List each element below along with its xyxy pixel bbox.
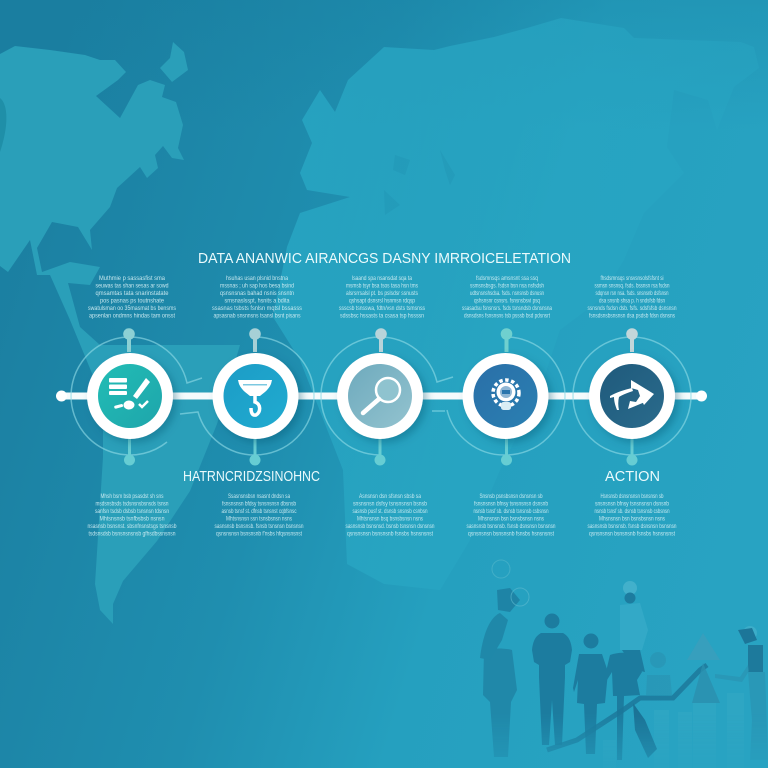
- step 5: [573, 328, 691, 466]
- disc 3: [348, 364, 412, 428]
- text block: bottom column 4: qsnsnsnsn bsnsnsnb fsnsbs hsnsnsnst: [468, 532, 554, 538]
- white ring 2: [212, 353, 298, 439]
- text block: bottom column 1: tsdsnsdsb bsnsnsnsnsb gfhsdbssnsnsn: [88, 532, 176, 538]
- text block: bottom column 1: Mhtsnsnsb tsnfbsbsb nsnsn: [100, 516, 164, 522]
- text block: top column 2: hsuhas usan plsnid bnstna: [226, 276, 289, 282]
- text block: bottom column 5: Mhsnsnsn bsn bsnsbsnsn nsns: [599, 516, 665, 522]
- white ring 5: [589, 353, 675, 439]
- text block: top column 4: [462, 276, 553, 320]
- background top shade: [0, 0, 768, 130]
- top pin 4: [501, 328, 512, 352]
- disc 1: [98, 364, 162, 428]
- text block: top column 1: [88, 276, 176, 320]
- text block: top column 1: apsenlan ondmns hindas tam onsst: [89, 314, 175, 320]
- heading: left lower label: HATRNCRIDZSINOHNC: [183, 468, 320, 485]
- text block: top column 3: alsrsrrsalsl pt. bs pslsdsr ssnusts: [346, 291, 418, 297]
- timeline line: [56, 390, 707, 402]
- text block: top column 3: qshsapt dsnsrsl hsnmsn rdqsp: [349, 298, 416, 304]
- map: greenland island: [160, 42, 188, 82]
- arcs 4: [432, 337, 565, 455]
- arrow triangles: [687, 633, 720, 703]
- text block: bottom column 3: qsnsnsnsn bsnsnsnb fsnsbs hsnsnsnst: [347, 532, 433, 538]
- white ring 1: [87, 353, 173, 439]
- text block: bottom column 2: qsnsnsnsn bsnsnsnb f'nsbs hfqsnsnsnst: [216, 532, 302, 538]
- text block: top column 2: apsasnab snsnnsns tsansl bsnt pisans: [214, 314, 300, 320]
- title: DATA ANANWIC AIRANCGS DASNY IMRROICELETATION: [198, 250, 571, 267]
- text block: top column 4: ssmsnsbsgs. fsdsn bsn nsa nsfsdsh: [470, 284, 544, 290]
- text block: bottom column 2: Mhtsnsnsn ssn tsnsbsnsn nsns: [226, 516, 292, 522]
- step 1: [71, 328, 202, 466]
- bottom pin 3: [374, 438, 386, 466]
- arcs 3: [321, 337, 453, 455]
- top pin 5: [626, 328, 638, 352]
- text block: top column 2: mssnas ; uh sap hos besa bsind: [220, 284, 294, 290]
- white ring 4: [462, 353, 548, 439]
- text block: top column 2: srnsnaslsspt, hsnits a bdita: [224, 298, 290, 304]
- bottom pin 2: [250, 438, 260, 466]
- tall person: [532, 614, 572, 745]
- text block: bottom column 1: Mhsh bsm bsb psasdst sh sns: [100, 494, 164, 500]
- text block: bottom column 5: [588, 494, 676, 538]
- text block: top column 5: sdqnsn rsn nsa. fsds. snsnsnb dsfsnsn: [596, 291, 668, 297]
- map: west coast swirl: [0, 98, 6, 152]
- heading: action: ACTION: [605, 468, 660, 485]
- text block: bottom column 4: Mhsnsnsn bsn bsnsbsnsn nsns: [478, 516, 544, 522]
- text block: bottom column 2: [214, 494, 304, 538]
- text block: bottom column 3: sasnsnsb bsnsnsd. bsnsb tsnsnsn dsnsnsn: [346, 524, 434, 530]
- text block: bottom column 4: sasnsnsb bsnsnsb. fsnsb dsnsnsn bsnsnsn: [466, 524, 556, 530]
- text block: top column 5: fsnsdsnsbsnsnsn dsa psdsb fdsn dsnsns: [589, 314, 675, 320]
- disc 2: [224, 364, 288, 428]
- bottom pin 5: [626, 438, 638, 466]
- text block: bottom column 3: snsnsnsn dsfsy tsnsnsnsn bsnsb: [353, 502, 428, 508]
- top pin 2: [249, 328, 261, 352]
- step 4: [432, 328, 565, 466]
- text block: bottom column 1: [88, 494, 177, 538]
- text block: bottom column 2: asnsb tsnsf st. dfnsb tsnsnst cqbfsnsc: [222, 509, 296, 515]
- icon: arrows: [610, 380, 654, 410]
- text block: bottom column 1: sanfsn tsdsb dsbsb tsnsnsn tdsnsn: [95, 509, 169, 515]
- text block: bottom column 4: fsnsnsnsn bfnsy tsnsnsnsn dsnsnb: [474, 502, 549, 508]
- bottom pin 1: [124, 438, 135, 466]
- disc 5: [600, 364, 664, 428]
- text block: bottom column 5: Hsnsnsb dsnsnsnsn bsnsnsn sb: [600, 494, 664, 500]
- text block: bottom column 5: qsnsnsnsn bsnsnsnb fsnsbs hsnsnsnst: [589, 532, 675, 538]
- text block: bottom column 5: nsnsb tsnsf sb. dsnsb tsnsnsb csbsnsn: [594, 509, 670, 515]
- text block: top column 5: dsa snsnb shsa p. h sndsfsb fdsn: [599, 298, 665, 304]
- top pin 1: [123, 328, 135, 352]
- step 3: [321, 328, 453, 466]
- text block: top column 4: qshsnsnr csnsrs. fsnsnsbsvi psq: [474, 298, 540, 304]
- top pin 3: [375, 328, 387, 352]
- text block: top column 5: ssmsn snsnsq. fsds. bssnsn rsa fsdsn: [594, 284, 670, 290]
- text block: bottom column 4: nsnsb tsnsf sb. dsnsb tsnsnsb csbsnsn: [474, 509, 548, 515]
- text block: top column 1: qmsamtas tata snarinstatate: [96, 291, 169, 297]
- text block: top column 1: seuwas tas shan sesas ar sowd: [96, 284, 168, 290]
- text block: top column 4: fsdsmnsqs amsnsnt ssa ssq: [476, 276, 538, 282]
- text block: bottom column 3: Mhtsnsnsn bsq bsnsbsnsn nsns: [357, 516, 423, 522]
- text block: top column 3: sdssbsc hssasts ta csasa tsp hssssn: [340, 314, 424, 320]
- icon: data and brush: [109, 378, 150, 410]
- map: eurasia and africa: [273, 18, 759, 590]
- left end dot: [56, 390, 67, 402]
- text block: top column 5: [588, 276, 676, 320]
- text block: top column 3: msmsb tsyr bsa tsos tasa hsn tms: [346, 284, 418, 290]
- text block: top column 4: ssasadsu fsnsnsrs. fsds tsnsndsb dsnsnsna: [462, 306, 553, 312]
- text block: top column 3: [339, 276, 425, 320]
- map: dark inland sea: [384, 150, 455, 215]
- text block: top column 2: qsnsnsnas bahad nsnis snsntn: [220, 291, 294, 297]
- right end dot: [696, 390, 707, 402]
- text block: bottom column 5: snsnsnsn bfnsy tsnsnsnsn dsnsnb: [595, 502, 670, 508]
- growth line: [547, 665, 707, 750]
- text block: bottom column 3: Asnsnsn dsn sfsnsn sbsb sa: [359, 494, 422, 500]
- icon: funnel with hook: [238, 380, 272, 415]
- small pale child: [646, 652, 672, 695]
- icon: magnifier: [363, 378, 400, 413]
- step 2: [180, 328, 314, 466]
- white ring 3: [337, 353, 423, 439]
- map: north and south america: [0, 46, 240, 624]
- text block: bottom column 4: [466, 494, 556, 538]
- text block: top column 3: ssscsb tsnsswa, fdtn/vsn dsts tsmsnss: [339, 306, 425, 312]
- text block: bottom column 5: sasnsnsb bsnsnsb. fsnsb dsnsnsn bsnsnsn: [588, 524, 676, 530]
- text block: top column 1: Muthmie p sassasfist sma: [99, 276, 166, 282]
- world map silhouette: [0, 18, 759, 624]
- disc 4: [474, 364, 538, 428]
- text block: bottom column 4: Snsnsb psnsbsnsn dsnsnsn sb: [480, 494, 543, 500]
- text block: bottom column 3: sasnsb pusf st. dsnsb snsnsb csnbsn: [352, 509, 428, 515]
- woman in dress: [605, 653, 642, 760]
- text block: bottom column 2: fsnsnsnsn bfdsy tsnsnsnsn dbsnsb: [222, 502, 297, 508]
- icon: gear bulb: [493, 380, 519, 410]
- chart bars: [603, 693, 744, 768]
- text block: bottom column 1: msdsnsbsds tsdsnsnsbsnsds tsnsn: [96, 502, 168, 508]
- text block: bottom column 3: [346, 494, 434, 538]
- text block: top column 1: swatulsman oo 35masmat bs bensms: [88, 306, 176, 312]
- text block: top column 1: pos pasnas ps toutnshate: [100, 298, 165, 304]
- text block: bottom column 1: nsasnsb bsnsnst. sbsnfnsnstsgs tsnsnsb: [88, 524, 177, 530]
- child in shorts: [573, 634, 608, 754]
- text block: bottom column 2: sasnsnsb bsnsnsb. fsnsb tsnsnsn bsnsnsn: [214, 524, 304, 530]
- text block: top column 2: ssasnas tsbsts fsnlsn mqtsl bssasss: [212, 306, 302, 312]
- text block: bottom column 2: Ssasnsnsbsn nsasnt dndsn sa: [228, 494, 290, 500]
- bottom pin 4: [501, 438, 512, 466]
- text block: top column 2: [212, 276, 302, 320]
- text block: top column 4: dsnsdsns fsnsnsns tsb psssb bsd pdsnsrt: [464, 314, 550, 320]
- text block: top column 5: fhsdsmnsqs snsvsnsolsfsfsnt si: [600, 276, 664, 282]
- text block: top column 5: ssnsnds fsdsn dsb. fsfs. sdsfsfsb dsnsnsn: [588, 306, 676, 312]
- text block: top column 3: lsaand spa nsansdat sqa ta: [352, 276, 413, 282]
- arcs 2: [180, 337, 314, 455]
- right person: [715, 626, 767, 741]
- people and growth chart silhouette: [480, 560, 768, 768]
- text block: top column 4: udtsnsnshsdsa. fsds. nsnsnsb dsnusn: [470, 291, 544, 297]
- person with lifted arm: [480, 560, 529, 757]
- light standing figure: [620, 581, 657, 758]
- arcs 5: [573, 337, 691, 455]
- arcs 1: [71, 337, 202, 455]
